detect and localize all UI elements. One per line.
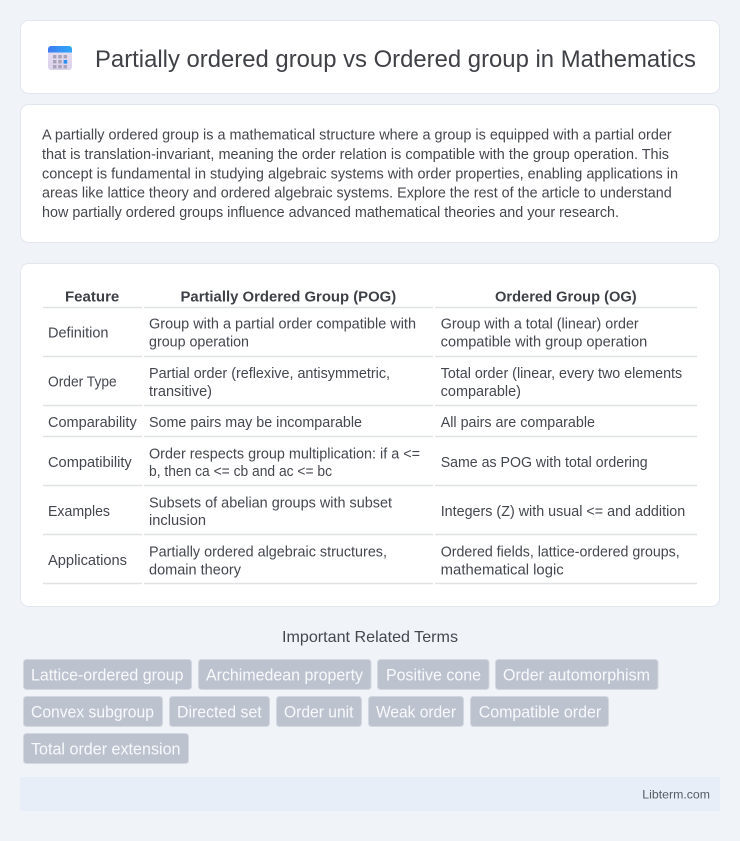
intro paragraph: concept is fundamental in studying algebraic systems with order properties, enabling applications in	[42, 166, 678, 182]
table header: Partially Ordered Group (POG)	[180, 290, 396, 306]
chip: Weak order	[368, 696, 464, 726]
row: applications: Applications	[48, 553, 127, 569]
row: compatibility: Same as POG with total ordering	[441, 455, 648, 471]
row: compatibility: Order respects group multiplication: if a <=	[149, 446, 420, 462]
row: order type	[43, 366, 697, 406]
intro paragraph: areas like lattice theory and ordered algebraic systems. Explore the rest of the article to understand	[42, 186, 672, 202]
row: order type: transitive)	[149, 384, 212, 400]
footer credit: Libterm.com	[642, 787, 710, 801]
chip: Total order extension	[24, 734, 188, 764]
row: definition: Definition	[48, 325, 109, 341]
related term chips	[24, 660, 658, 764]
related terms heading: Important Related Terms	[282, 629, 458, 646]
intro paragraph	[42, 127, 678, 221]
row: examples: Integers (Z) with usual <= and addition	[441, 504, 685, 520]
chip: Total order extension: Total order extension	[31, 740, 180, 758]
chip: Archimedean property	[198, 660, 371, 690]
row: examples: Examples	[48, 504, 110, 520]
header panel	[20, 20, 720, 94]
table header	[43, 290, 697, 308]
chip: Archimedean property: Archimedean property	[206, 667, 364, 685]
row: definition: compatible with group operation	[441, 334, 647, 350]
row: comparability: Comparability	[48, 415, 138, 431]
row: comparability: All pairs are comparable	[441, 415, 595, 431]
intro paragraph: that is translation-invariant, meaning the order relation is compatible with the group operation. This	[42, 147, 669, 163]
chip: Convex subgroup	[24, 696, 162, 726]
row: applications	[43, 544, 697, 584]
row: examples: Subsets of abelian groups with subset	[149, 495, 392, 511]
chip: Positive cone	[378, 660, 489, 690]
chip: Lattice-ordered group	[24, 660, 192, 690]
panel: introduction	[20, 104, 720, 242]
row: compatibility: Compatibility	[48, 455, 133, 471]
chip: Lattice-ordered group: Lattice-ordered group	[31, 667, 184, 685]
icon: calendar	[48, 46, 72, 70]
row: order type: Partial order (reflexive, antisymmetric,	[149, 366, 390, 382]
chip: Compatible order	[470, 696, 608, 726]
row: applications: Ordered fields, lattice-ordered groups,	[441, 544, 680, 560]
row: order type: comparable)	[441, 384, 521, 400]
row: applications: Partially ordered algebraic structures,	[149, 544, 387, 560]
row: order type: Total order (linear, every two elements	[441, 366, 682, 382]
row: definition: Group with a partial order compatible with	[149, 316, 416, 332]
chip: Convex subgroup: Convex subgroup	[31, 704, 154, 722]
footer bar	[20, 777, 720, 811]
row: applications: domain theory	[149, 562, 242, 578]
intro paragraph: how partially ordered groups influence advanced mathematical theories and your research.	[42, 205, 619, 221]
chip: Order automorphism	[496, 660, 658, 690]
row: examples	[43, 495, 697, 534]
row: definition: group operation	[149, 334, 249, 350]
table header: Ordered Group (OG)	[495, 290, 637, 306]
row: applications: mathematical logic	[441, 562, 564, 578]
chip: Positive cone: Positive cone	[386, 667, 481, 685]
row: definition	[43, 316, 697, 356]
table header: Feature	[65, 290, 119, 306]
chip: Directed set: Directed set	[177, 704, 262, 722]
row: definition: Group with a total (linear) order	[441, 316, 639, 332]
intro paragraph: A partially ordered group is a mathematical structure where a group is equipped with a partial order	[42, 127, 672, 143]
chip: Order unit: Order unit	[284, 704, 354, 722]
panel: comparison table	[20, 264, 720, 606]
row: order type: Order Type	[48, 374, 117, 390]
chip: Compatible order: Compatible order	[479, 704, 602, 722]
row: comparability	[43, 415, 697, 436]
row: compatibility	[43, 446, 697, 486]
chip: Order unit	[276, 696, 362, 726]
row: comparability: Some pairs may be incomparable	[149, 415, 362, 431]
row: compatibility: b, then ca <= cb and ac <= bc	[149, 464, 332, 480]
chip: Order automorphism: Order automorphism	[503, 667, 650, 685]
chip: Directed set	[170, 696, 270, 726]
title: Partially ordered group vs Ordered group in Mathematics	[95, 46, 696, 73]
row: examples: inclusion	[149, 513, 206, 529]
chip: Weak order: Weak order	[376, 704, 457, 722]
